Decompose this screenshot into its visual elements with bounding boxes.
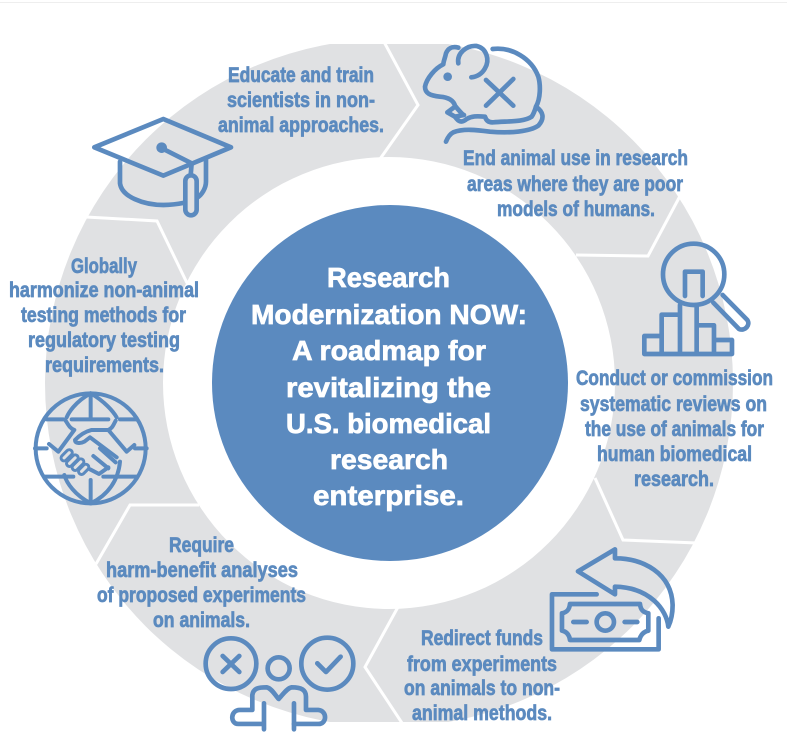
title: Research [327, 262, 450, 293]
text: educate and train: Educate and train [228, 64, 374, 87]
icon: graduation cap [94, 119, 231, 215]
text: globally harmonize: testing methods for [21, 304, 186, 327]
text: end animal use: areas where they are poor [467, 173, 683, 196]
text: redirect funds: from experiments [407, 653, 557, 676]
title: revitalizing the [286, 372, 491, 403]
text: harm-benefit analyses: harm-benefit analyses [106, 559, 298, 582]
icon: mouse with x [425, 46, 543, 142]
title: enterprise. [313, 480, 464, 511]
text: end animal use: End animal use in research [463, 147, 688, 170]
text: systematic reviews [576, 367, 773, 491]
text: redirect funds: Redirect funds [421, 627, 543, 650]
text: systematic reviews: research. [634, 468, 714, 491]
text: end animal use [463, 147, 688, 221]
text: harm-benefit analyses: of proposed experiments [97, 584, 306, 607]
text: globally harmonize: requirements. [45, 354, 164, 377]
text: redirect funds: animal methods. [412, 702, 552, 725]
text: end animal use: models of humans. [497, 198, 655, 221]
text: globally harmonize: harmonize non-animal [9, 279, 199, 302]
text: globally harmonize [9, 255, 199, 377]
text: educate and train: scientists in non- [227, 89, 375, 112]
title: Modernization NOW: [251, 299, 527, 330]
text: harm-benefit analyses [97, 534, 306, 632]
icon: magnifier over bar chart [644, 244, 748, 354]
text: globally harmonize: regulatory testing [28, 329, 180, 352]
icon: two choices and person [206, 638, 353, 729]
text: redirect funds: on animals to non- [404, 677, 560, 700]
icon: money with return arrow [552, 549, 673, 649]
text: globally harmonize: Globally [71, 255, 137, 278]
title [251, 262, 527, 511]
text: harm-benefit analyses: on animals. [153, 609, 250, 632]
text: harm-benefit analyses: Require [169, 534, 234, 557]
center circle [212, 205, 568, 561]
text: redirect funds [404, 627, 560, 725]
text: educate and train [218, 64, 384, 137]
text: systematic reviews: human biomedical [597, 443, 752, 466]
icon: globe with handshake [35, 393, 147, 503]
text: educate and train: animal approaches. [218, 114, 384, 137]
title: research [330, 444, 448, 475]
title: U.S. biomedical [286, 408, 491, 439]
title: A roadmap for [292, 335, 486, 366]
